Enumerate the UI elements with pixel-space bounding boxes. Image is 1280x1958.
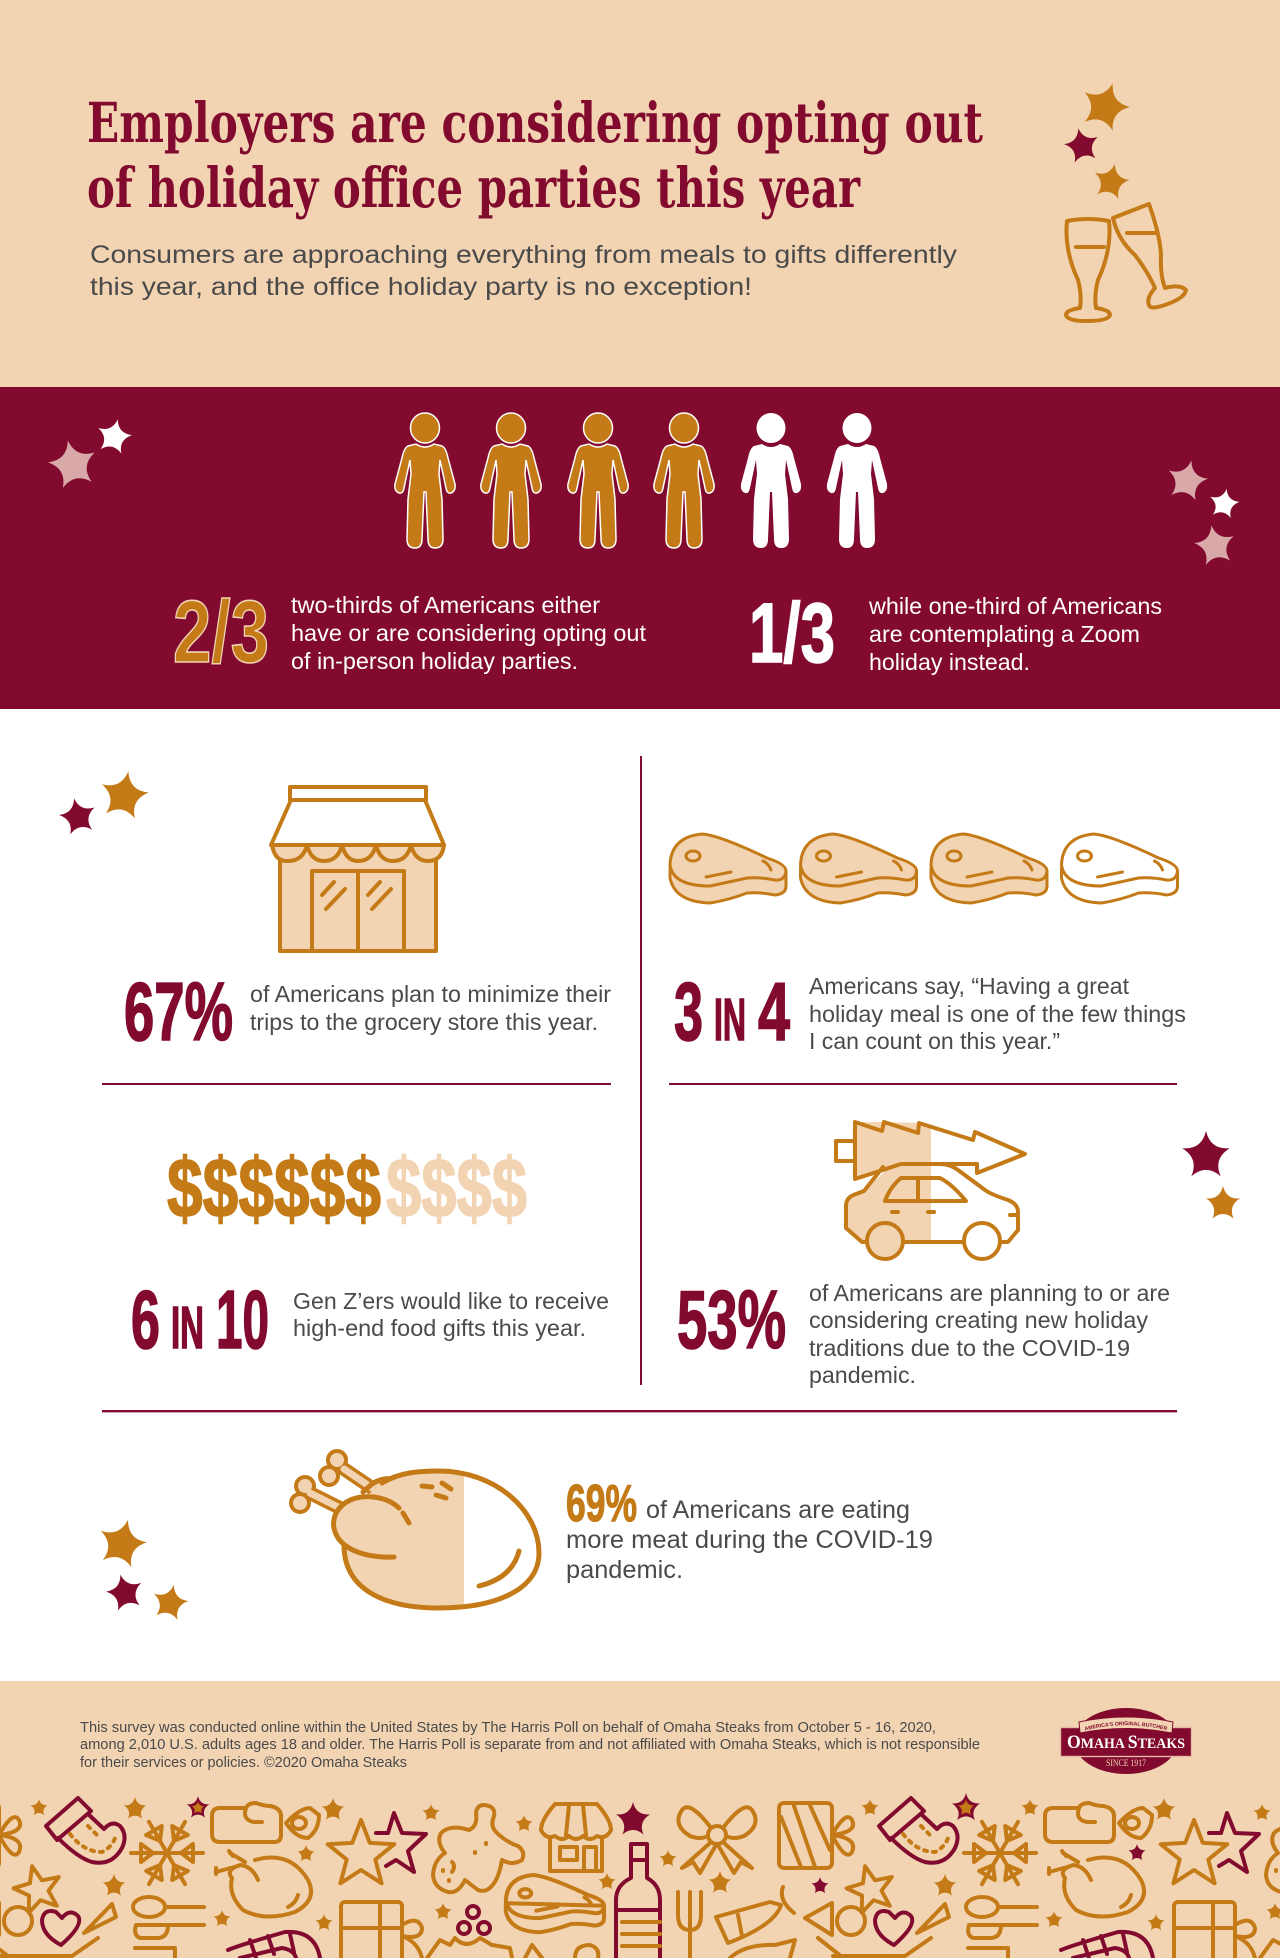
text: 69%: more meat during the COVID-19: [566, 1526, 933, 1554]
title: Employers are considering opting out: [87, 90, 983, 155]
survey note: for their services or policies. ©2020 Omaha Steaks: [80, 1755, 407, 1771]
text: 67%: trips to the grocery store this year.: [250, 1009, 598, 1035]
stars: header: [1061, 76, 1135, 200]
stars: band: [45, 416, 1241, 566]
text: 67%: of Americans plan to minimize their: [250, 981, 611, 1007]
stat: 67%: 67%: [124, 965, 233, 1058]
survey note: [80, 1720, 980, 1771]
subtitle: [90, 241, 958, 301]
icon: six people: [395, 413, 887, 548]
icon: champagne glasses: [1066, 204, 1186, 321]
text: one-third: are contemplating a Zoom: [869, 621, 1140, 647]
stat: 6 in 10: IN: [171, 1295, 204, 1361]
text: 53%: [809, 1280, 1170, 1388]
header background: [0, 0, 1280, 387]
subtitle: Consumers are approaching everything from meals to gifts differently: [90, 241, 958, 269]
survey note: among 2,010 U.S. adults ages 18 and older. The Harris Poll is separate from and not affiliated with Omaha Steaks, which is not responsible: [80, 1737, 980, 1753]
text: 53%: considering creating new holiday: [809, 1307, 1149, 1333]
icon: car with tree: [836, 1122, 1025, 1259]
text: 3 in 4: Americans say, “Having a great: [809, 973, 1130, 999]
title: of holiday office parties this year: [87, 155, 861, 220]
logo: Omaha Steaks: [1060, 1708, 1192, 1774]
text: two-thirds: [291, 592, 647, 674]
stat: 3 in 4: [674, 965, 790, 1058]
text: 6 in 10: high-end food gifts this year.: [293, 1315, 586, 1341]
stars: turkey: [94, 1514, 191, 1621]
text: two-thirds: have or are considering opting out: [291, 620, 647, 646]
logo: Omaha Steaks: AMERICA'S ORIGINAL BUTCHER: [1085, 1721, 1168, 1730]
text: 69%: pandemic.: [566, 1556, 683, 1584]
icon: dollar signs: $$$$$$: [167, 1141, 381, 1235]
text: two-thirds: of in-person holiday parties.: [291, 648, 578, 674]
stat: 3 in 4: 4: [758, 965, 790, 1058]
stat: 3 in 4: IN: [714, 987, 746, 1053]
text: 69%: [566, 1496, 933, 1584]
subtitle: this year, and the office holiday party is no exception!: [90, 273, 752, 301]
stars: car: [1182, 1131, 1240, 1219]
text: 53%: pandemic.: [809, 1362, 916, 1388]
text: 6 in 10: [293, 1288, 609, 1341]
text: 3 in 4: holiday meal is one of the few things: [809, 1001, 1186, 1027]
survey note: This survey was conducted online within the United States by The Harris Poll on behalf of Omaha Steaks from October 5 - 16, 2020,: [80, 1720, 936, 1736]
stat: 3 in 4: 3: [674, 965, 703, 1058]
stat: 2/3: 2/3: [173, 582, 269, 681]
icon: turkey: [291, 1451, 539, 1608]
icon: store: [271, 787, 444, 951]
stars: store: [56, 767, 152, 836]
text: 67%: [250, 981, 611, 1035]
logo: Omaha Steaks: OMAHA STEAKS: [1067, 1732, 1185, 1753]
pattern stars: [30, 1793, 1280, 1930]
icon: four steaks: [670, 834, 1178, 903]
stat: 6 in 10: [131, 1273, 269, 1366]
text: 53%: traditions due to the COVID-19: [809, 1335, 1130, 1361]
text: 69%: of Americans are eating: [646, 1496, 910, 1524]
logo: Omaha Steaks: SINCE 1917: [1106, 1758, 1146, 1768]
panel: grid dividers: [102, 756, 1177, 1412]
text: one-third: [868, 593, 1162, 675]
text: 6 in 10: Gen Z’ers would like to receive: [293, 1288, 609, 1314]
text: 3 in 4: [809, 973, 1186, 1054]
stat: 1/3: 1/3: [749, 586, 835, 680]
stat: 69%: 69%: [566, 1475, 637, 1533]
text: one-third: while one-third of Americans: [868, 593, 1162, 619]
stat: 53%: 53%: [677, 1273, 786, 1366]
text: 53%: of Americans are planning to or are: [809, 1280, 1170, 1306]
text: two-thirds: two-thirds of Americans either: [291, 592, 600, 618]
panel: footer: [0, 1681, 1280, 1958]
text: one-third: holiday instead.: [869, 649, 1030, 675]
text: 3 in 4: I can count on this year.”: [809, 1028, 1060, 1054]
holiday icon pattern: [0, 1798, 1280, 1958]
icon: dollar signs: $$$$: [386, 1141, 527, 1235]
stat: 6 in 10: 6: [131, 1273, 160, 1366]
title: [87, 90, 983, 220]
panel: maroon band: [0, 387, 1280, 709]
stat: 6 in 10: 10: [216, 1273, 269, 1366]
